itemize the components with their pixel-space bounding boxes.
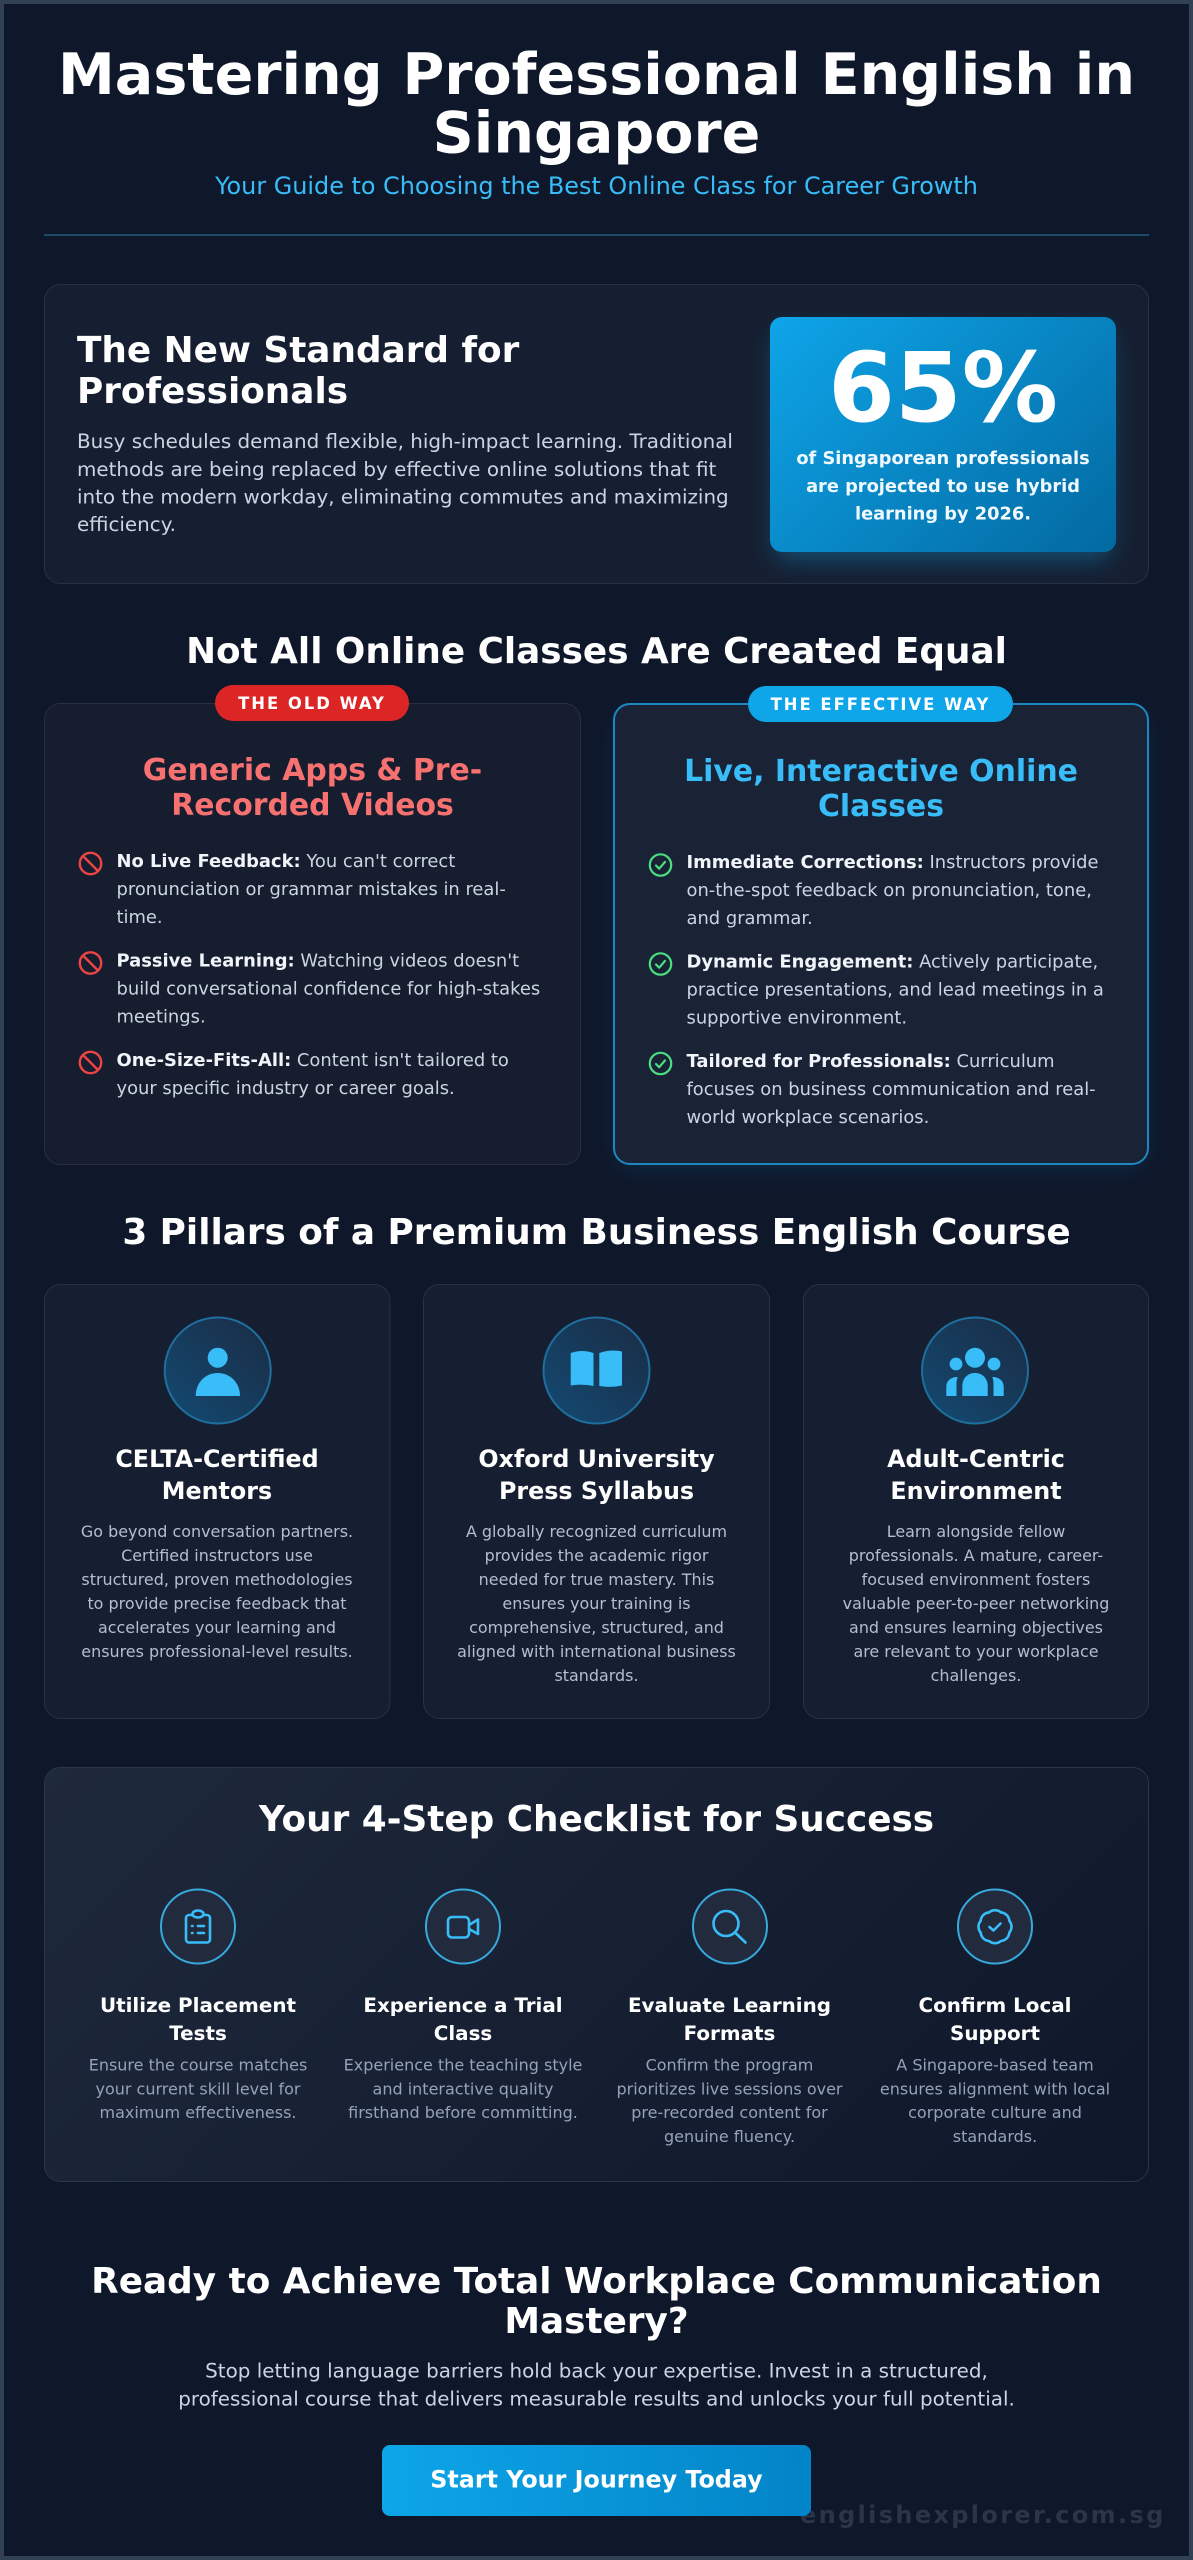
list item: passive learning: Watching videos doesn't xyxy=(300,950,519,972)
step 3: learning formats: Confirm the program xyxy=(646,2056,813,2075)
heading: call to action: Ready to Achieve Total Workplace Communication xyxy=(91,2261,1102,2302)
step 4: local support: standards. xyxy=(953,2127,1037,2146)
list item: tailored for professionals xyxy=(650,1051,1096,1128)
icon: person xyxy=(165,1318,271,1424)
step 1: placement tests xyxy=(89,1890,307,2122)
list item: one size fits all: your specific industry or career goals. xyxy=(116,1078,455,1099)
list item: one size fits all xyxy=(80,1050,509,1099)
title: Mastering Professional English in xyxy=(58,42,1135,108)
step 4: local support: Confirm Local xyxy=(918,1994,1072,2017)
pillar text: standards. xyxy=(554,1666,639,1685)
list item: dynamic engagement: supportive environment. xyxy=(686,1008,907,1028)
pillar title: Adult-Centric xyxy=(887,1445,1065,1473)
pillar text: valuable peer-to-peer networking xyxy=(843,1594,1109,1613)
pillar title: Oxford University xyxy=(478,1445,715,1473)
pillar text: comprehensive, structured, and xyxy=(469,1618,724,1637)
panel: pillar 1 CELTA mentors xyxy=(44,1284,390,1718)
pillar title: Press Syllabus xyxy=(499,1477,694,1505)
icon: group of people xyxy=(922,1318,1028,1424)
title: Singapore xyxy=(433,100,760,166)
button: start your journey xyxy=(382,2445,811,2516)
pillar text: ensures your training is xyxy=(502,1594,691,1613)
step 3: learning formats: prioritizes live sessions over xyxy=(616,2080,843,2098)
icon: verified badge xyxy=(958,1890,1032,1964)
pillar text: Learn alongside fellow xyxy=(887,1522,1065,1541)
heading: pillars: 3 Pillars of a Premium Business English Course xyxy=(122,1212,1071,1253)
step 2: trial class: firsthand before committing. xyxy=(348,2103,578,2122)
heading: call to action: Mastery? xyxy=(504,2301,689,2342)
heading: comparison: Not All Online Classes Are Created Equal xyxy=(186,631,1007,672)
stat box: 65%: are projected to use hybrid xyxy=(806,476,1080,497)
text: call to action paragraph: Stop letting language barriers hold back your expertise. Invest in a structured, xyxy=(205,2360,988,2383)
card title: live interactive: Classes xyxy=(818,789,944,824)
pillar title: CELTA-Certified xyxy=(115,1445,319,1473)
icon: open book xyxy=(544,1318,650,1424)
list item: passive learning: Passive Learning: xyxy=(116,950,295,972)
panel: the old way xyxy=(44,685,580,1164)
step 1: placement tests: maximum effectiveness. xyxy=(100,2103,296,2122)
text: call to action paragraph: professional course that delivers measurable results and unlocks your full potential. xyxy=(178,2388,1015,2410)
step 1: placement tests: Tests xyxy=(169,2022,227,2045)
list item: passive learning: meetings. xyxy=(116,1006,206,1028)
panel: pillar 2 Oxford syllabus xyxy=(424,1284,770,1718)
list item: immediate corrections: on-the-spot feedback on pronunciation, tone, xyxy=(686,880,1092,901)
list item: passive learning xyxy=(80,950,540,1028)
pillar text: ensures professional-level results. xyxy=(81,1642,353,1661)
pillar text: challenges. xyxy=(931,1666,1021,1685)
stat box: 65%: 65% xyxy=(828,332,1058,444)
heading: new standard: The New Standard for xyxy=(77,330,520,371)
pillar text: aligned with international business xyxy=(457,1642,736,1661)
badge: the old way: THE OLD WAY xyxy=(238,694,386,713)
step 4: local support: ensures alignment with local xyxy=(880,2080,1110,2098)
list item: immediate corrections: and grammar. xyxy=(686,908,813,929)
pillar text: to provide precise feedback that xyxy=(87,1594,347,1613)
step 1: placement tests: Ensure the course matches xyxy=(89,2056,307,2075)
list item: no live feedback xyxy=(80,851,506,928)
stat box: 65% xyxy=(770,317,1116,560)
step 1: placement tests: your current skill level for xyxy=(95,2080,301,2098)
badge: the effective way: THE EFFECTIVE WAY xyxy=(771,695,990,714)
pillar text: provides the academic rigor xyxy=(485,1546,709,1565)
step 3: learning formats xyxy=(616,1890,843,2146)
panel: 4-step checklist xyxy=(44,1768,1148,2182)
pillar text: focused environment fosters xyxy=(862,1570,1090,1589)
pillar text: needed for true mastery. This xyxy=(479,1570,714,1589)
list item: no live feedback: No Live Feedback: xyxy=(116,851,301,872)
step 2: trial class: Experience a Trial xyxy=(363,1994,563,2017)
header xyxy=(44,42,1149,236)
watermark: englishexplorer.com.sg xyxy=(800,2501,1166,2529)
call to action xyxy=(91,2261,1166,2529)
pillar text: professionals. A mature, career- xyxy=(849,1546,1103,1565)
button: start your journey: Start Your Journey Today xyxy=(430,2465,763,2493)
list item: dynamic engagement: practice presentations, and lead meetings in a xyxy=(686,980,1104,1000)
list item: tailored for professionals: Tailored for Professionals: xyxy=(686,1051,951,1072)
pillar title: Environment xyxy=(890,1477,1062,1505)
list item: no live feedback: time. xyxy=(116,907,163,928)
subtitle: Your Guide to Choosing the Best Online Class for Career Growth xyxy=(214,172,978,200)
badge: the effective way xyxy=(748,686,1013,722)
list item: no live feedback: You can't correct xyxy=(306,851,455,872)
stat box: 65%: of Singaporean professionals xyxy=(796,448,1090,469)
badge: the old way xyxy=(215,685,409,721)
step 3: learning formats: Evaluate Learning xyxy=(628,1994,831,2017)
step 1: placement tests: Utilize Placement xyxy=(100,1994,297,2017)
step 4: local support: Support xyxy=(950,2022,1040,2045)
list item: one size fits all: Content isn't tailored to xyxy=(297,1050,509,1071)
list item: tailored for professionals: Curriculum xyxy=(956,1051,1055,1072)
step 2: trial class: and interactive quality xyxy=(373,2080,553,2098)
card title: generic apps: Generic Apps & Pre- xyxy=(143,753,482,788)
list item: immediate corrections: Instructors provide xyxy=(930,852,1099,873)
step 2: trial class: Class xyxy=(434,2022,492,2045)
step 3: learning formats: pre-recorded content for xyxy=(631,2103,828,2122)
card title: live interactive: Live, Interactive Online xyxy=(684,754,1078,789)
stat box: 65%: learning by 2026. xyxy=(855,504,1031,524)
card title: generic apps: Recorded Videos xyxy=(171,788,454,823)
list item: immediate corrections: Immediate Corrections: xyxy=(686,852,924,873)
list item: dynamic engagement xyxy=(650,952,1104,1028)
icon: clipboard xyxy=(161,1890,235,1964)
pillar text: are relevant to your workplace xyxy=(853,1642,1099,1661)
icon: video camera xyxy=(426,1890,500,1964)
pillar text: accelerates your learning and xyxy=(98,1618,336,1637)
list item: one size fits all: One-Size-Fits-All: xyxy=(116,1050,291,1071)
pillar text: structured, proven methodologies xyxy=(81,1570,353,1589)
pillar title: Mentors xyxy=(162,1477,272,1505)
pillar text: and ensures learning objectives xyxy=(849,1618,1103,1637)
pillar text: Certified instructors use xyxy=(121,1546,313,1565)
panel: the effective way xyxy=(614,686,1148,1167)
step 4: local support xyxy=(880,1890,1110,2146)
text: intro paragraph: efficiency. xyxy=(77,513,176,536)
heading: checklist: Your 4-Step Checklist for Success xyxy=(258,1799,934,1840)
step 3: learning formats: genuine fluency. xyxy=(664,2127,795,2146)
list item: tailored for professionals: focuses on business communication and real- xyxy=(686,1079,1096,1100)
list item: tailored for professionals: world workplace scenarios. xyxy=(686,1107,929,1128)
step 2: trial class xyxy=(344,1890,582,2122)
list item: passive learning: build conversational confidence for high-stakes xyxy=(116,978,540,1000)
step 2: trial class: Experience the teaching style xyxy=(344,2056,582,2075)
text: intro paragraph: Busy schedules demand flexible, high-impact learning. Traditional xyxy=(77,430,733,453)
step 4: local support: A Singapore-based team xyxy=(896,2056,1094,2075)
list item: no live feedback: pronunciation or grammar mistakes in real- xyxy=(116,879,506,900)
list item: immediate corrections xyxy=(650,852,1099,929)
panel: pillar 3 adult-centric xyxy=(804,1284,1148,1718)
step 4: local support: corporate culture and xyxy=(908,2103,1082,2122)
icon: magnifier xyxy=(693,1890,767,1964)
panel: the new standard xyxy=(44,284,1148,584)
list item: dynamic engagement: Actively participate, xyxy=(919,952,1098,972)
pillar text: A globally recognized curriculum xyxy=(466,1522,727,1541)
text: intro paragraph: into the modern workday, eliminating commutes and maximizing xyxy=(77,486,729,508)
step 3: learning formats: Formats xyxy=(684,2022,775,2045)
heading: new standard: Professionals xyxy=(77,371,348,412)
text: intro paragraph: methods are being replaced by effective online solutions that fit xyxy=(77,458,717,481)
pillar text: Go beyond conversation partners. xyxy=(81,1522,353,1541)
list item: dynamic engagement: Dynamic Engagement: xyxy=(686,952,913,972)
